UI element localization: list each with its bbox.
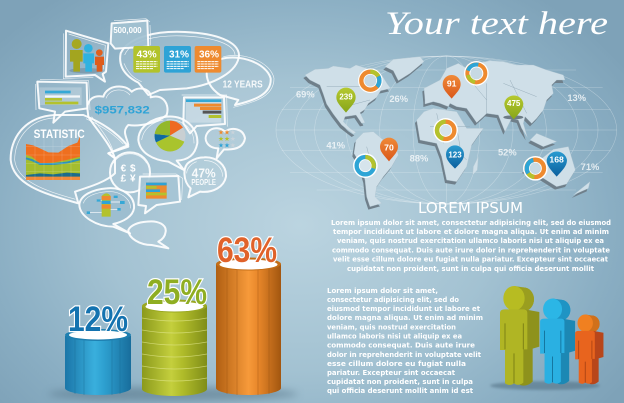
centered paragraph: commodo consequat. Duis aute irure dolor in reprehenderit in voluptate bbox=[332, 246, 610, 254]
world map bbox=[276, 56, 617, 210]
left paragraph: pariatur. Excepteur sint occaecat bbox=[327, 368, 456, 377]
bubble: currency: ¥ bbox=[130, 174, 136, 185]
pin 91: 91 bbox=[447, 78, 457, 88]
bubble: 500,000: 500,000 bbox=[113, 25, 142, 35]
bubble: bar mini chart bbox=[182, 95, 227, 133]
pin 91 bbox=[443, 75, 461, 99]
pin 70 bbox=[380, 138, 398, 161]
stat cards bbox=[133, 46, 221, 73]
bubble: 47% people bbox=[184, 157, 226, 197]
map percentage labels: 52% bbox=[498, 147, 517, 157]
bubble: rating stars: ★★★ bbox=[218, 129, 236, 137]
pin 123 bbox=[446, 145, 464, 169]
bubble: 47% people: 47% bbox=[192, 166, 216, 180]
cylinder 25%: 25% bbox=[147, 273, 207, 312]
map grid bbox=[276, 56, 617, 204]
doodle speech bubbles bbox=[11, 19, 274, 248]
pin 239: 239 bbox=[339, 92, 353, 101]
donut south america bbox=[353, 153, 378, 178]
left paragraph: commodo consequat. Duis aute irure bbox=[327, 340, 475, 350]
left paragraph: Lorem ipsum dolor sit amet, bbox=[327, 286, 438, 295]
left paragraph: esse cillum dolore eu fugiat nulla bbox=[327, 359, 466, 368]
map percentage labels: 69% bbox=[296, 89, 315, 99]
bubble: table bbox=[138, 174, 183, 213]
donut australia bbox=[523, 156, 548, 181]
pie chart bbox=[155, 121, 185, 151]
left paragraph: consectetur adipisicing elit, sed do bbox=[327, 295, 459, 304]
left paragraph bbox=[327, 286, 483, 395]
blue person bbox=[540, 299, 575, 384]
card 36%: 36% bbox=[199, 50, 219, 61]
bubble: people bbox=[63, 31, 108, 82]
pin 168 bbox=[547, 152, 567, 177]
bubble: twelve years bbox=[207, 55, 274, 107]
card 31%: 31% bbox=[169, 50, 189, 61]
bubble: twelve years: 12 YEARS bbox=[223, 79, 263, 90]
map percentage labels bbox=[296, 89, 600, 172]
map percentage labels: 13% bbox=[567, 93, 587, 103]
centered paragraph bbox=[331, 218, 611, 273]
pin 168: 168 bbox=[549, 155, 564, 165]
bubble: pie bbox=[138, 117, 197, 170]
bubble: horizontal bars bbox=[35, 79, 90, 123]
pin 239 bbox=[336, 88, 356, 113]
map percentage labels: 26% bbox=[389, 94, 409, 104]
cylinder 63% bbox=[216, 231, 281, 395]
bubble: rating stars bbox=[206, 128, 245, 158]
bubble: statistic bbox=[11, 115, 128, 203]
left paragraph: dolore magna aliqua. Ut enim ad minim bbox=[327, 313, 483, 322]
left paragraph: veniam, quis nostrud exercitation bbox=[327, 322, 456, 332]
bubble: top stats bbox=[120, 32, 239, 95]
pin 70: 70 bbox=[384, 143, 394, 153]
area chart bbox=[26, 137, 80, 180]
map percentage labels: 88% bbox=[410, 153, 429, 163]
cylinder 63%: 63% bbox=[217, 231, 277, 270]
statistic heading: STATISTIC bbox=[34, 127, 85, 141]
centered paragraph: Lorem ipsum dolor sit amet, consectetur adipisicing elit, sed do eiusmod bbox=[331, 218, 611, 227]
people icon group bbox=[490, 286, 603, 390]
card 43%: 43% bbox=[137, 50, 157, 61]
bubble: currency: $ bbox=[130, 163, 136, 174]
bar chart: cylinders bbox=[48, 231, 298, 401]
bubble: 500,000 bbox=[111, 19, 151, 49]
pin 123: 123 bbox=[448, 150, 462, 159]
bubble: currency bbox=[110, 152, 150, 192]
title: Your text here bbox=[385, 6, 608, 42]
continents bbox=[303, 57, 590, 210]
bubble: 47% people: PEOPLE bbox=[191, 177, 216, 187]
bubble: currency: € bbox=[121, 163, 127, 174]
centered paragraph: tempor incididunt ut labore et dolore magna aliqua. Ut enim ad minim bbox=[333, 227, 609, 236]
donut north america bbox=[358, 68, 383, 93]
bubble: rating stars: ★★★ bbox=[218, 135, 236, 143]
donut africa bbox=[433, 118, 458, 143]
left paragraph: dolor in reprehenderit in voluptate velit bbox=[327, 350, 482, 359]
bubble: rating stars: ★★★ bbox=[218, 142, 236, 150]
bubble: process bbox=[79, 188, 134, 233]
bubble: cloud amount: $957,832 bbox=[95, 104, 150, 116]
left paragraph: ullamco laboris nisi ut aliquip ex ea bbox=[327, 332, 462, 340]
olive person bbox=[500, 286, 539, 386]
orange person bbox=[575, 315, 603, 384]
centered paragraph: velit esse cillum dolore eu fugiat nulla pariatur. Excepteur sint occaecat bbox=[333, 254, 609, 264]
cylinder 25% bbox=[142, 273, 207, 396]
centered paragraph: cupidatat non proident, sunt in culpa qui officia deserunt mollit bbox=[347, 264, 595, 273]
centered paragraph: veniam, quis nostrud exercitation ullamco laboris nisi ut aliquip ex ea bbox=[337, 236, 604, 245]
left paragraph: cupidatat non proident, sunt in culpa bbox=[327, 377, 473, 386]
cylinder 12% bbox=[65, 300, 131, 395]
donut russia bbox=[464, 61, 489, 86]
map percentage labels: 41% bbox=[326, 141, 346, 151]
left paragraph: qui officia deserunt mollit anim id est bbox=[327, 386, 474, 395]
cylinder 12%: 12% bbox=[68, 300, 128, 339]
map percentage labels: 71% bbox=[581, 162, 600, 172]
bubble: cloud amount bbox=[87, 86, 168, 158]
heading: lorem ipsum: LOREM IPSUM bbox=[418, 199, 523, 217]
bubble: bottom empty bbox=[128, 221, 168, 248]
pin 475: 475 bbox=[507, 99, 521, 108]
bubble: currency: £ bbox=[121, 174, 127, 185]
pin 475 bbox=[503, 95, 523, 119]
left paragraph: eiusmod tempor incididunt ut labore et bbox=[327, 304, 481, 313]
